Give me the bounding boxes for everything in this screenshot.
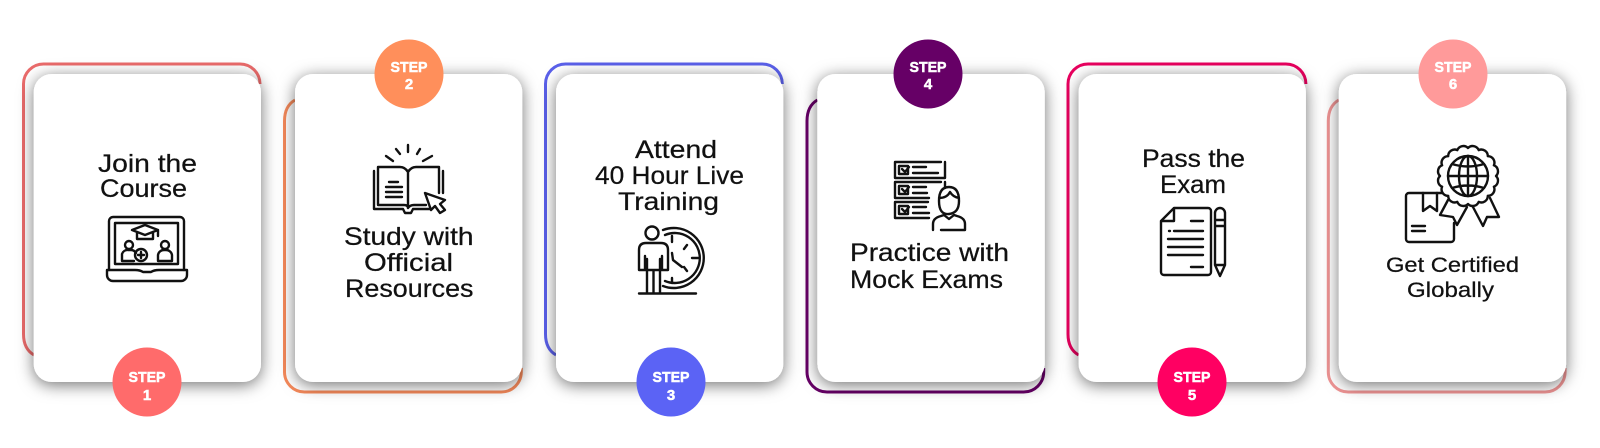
heading: study with official resources: Resources xyxy=(345,275,474,303)
badge: step 6 xyxy=(1418,40,1488,108)
badge: step 4: 4 xyxy=(924,76,933,93)
heading: practice with mock exams: Mock Exams xyxy=(850,266,1003,294)
heading: practice with mock exams: Practice with xyxy=(850,239,1009,267)
icon: globe rosette and parcel xyxy=(1406,146,1499,242)
badge: step 3: 3 xyxy=(667,387,675,404)
heading: get certified globally: Get Certified xyxy=(1386,253,1519,277)
heading: practice with mock exams xyxy=(850,239,1009,294)
badge: step 5: STEP xyxy=(1174,369,1210,386)
heading: study with official resources: Official xyxy=(364,249,453,277)
card outline: step 6 xyxy=(1328,100,1565,392)
heading: pass the exam: Pass the xyxy=(1142,145,1245,173)
heading: get certified globally xyxy=(1386,253,1519,302)
panel: step 2 study with official resources xyxy=(284,40,522,392)
badge: step 6: 6 xyxy=(1449,76,1457,93)
badge: step 3 xyxy=(636,348,706,416)
card outline: step 2 xyxy=(284,100,521,392)
card: step 6 xyxy=(1339,74,1566,382)
card: step 4 xyxy=(817,74,1045,382)
heading: attend 40 hour live training: Training xyxy=(618,188,719,216)
badge: step 4 xyxy=(894,40,962,108)
icon: laptop with graduate cap xyxy=(107,217,187,281)
badge: step 1: 1 xyxy=(143,387,151,404)
heading: study with official resources: Study with xyxy=(344,223,474,251)
badge: step 5 xyxy=(1158,348,1226,416)
panel: step 3 attend live training xyxy=(546,64,783,416)
heading: pass the exam: Exam xyxy=(1160,171,1226,199)
icon: open book with cursor xyxy=(374,145,445,213)
heading: study with official resources xyxy=(344,223,474,303)
badge: step 3: STEP xyxy=(652,369,690,386)
heading: pass the exam xyxy=(1142,145,1245,199)
badge: step 1: STEP xyxy=(128,369,166,386)
heading: attend 40 hour live training: 40 Hour Live xyxy=(595,162,744,190)
icon: person and clock xyxy=(639,226,704,294)
card outline: step 5 xyxy=(1068,64,1306,355)
panel: step 4 practice with mock exams xyxy=(807,40,1045,392)
card: step 3 xyxy=(556,74,783,382)
card outline: step 4 xyxy=(807,100,1044,392)
heading: attend 40 hour live training: Attend xyxy=(635,136,717,164)
card outline: step 3 xyxy=(546,64,782,355)
panel: step 5 pass the exam xyxy=(1068,64,1306,416)
heading: join the course: Course xyxy=(100,175,187,203)
badge: step 2 xyxy=(374,40,444,108)
card: step 1 xyxy=(34,74,261,382)
icon: document and pencil xyxy=(1161,208,1225,276)
badge: step 5: 5 xyxy=(1188,387,1196,404)
card outline: step 1 xyxy=(24,64,260,355)
heading: join the course: Join the xyxy=(98,150,197,178)
card: step 5 xyxy=(1079,74,1306,382)
badge: step 2: 2 xyxy=(405,76,413,93)
icon: checklist and person xyxy=(895,162,965,230)
badge: step 1 xyxy=(112,348,182,416)
heading: join the course xyxy=(98,150,197,203)
heading: get certified globally: Globally xyxy=(1407,278,1494,302)
badge: step 6: STEP xyxy=(1434,59,1472,76)
badge: step 2: STEP xyxy=(390,59,428,76)
panel: step 1 join the course xyxy=(24,64,261,416)
heading: attend 40 hour live training xyxy=(595,136,744,216)
card: step 2 xyxy=(295,74,522,382)
badge: step 4: STEP xyxy=(910,59,946,76)
panel: step 6 get certified globally xyxy=(1328,40,1566,392)
